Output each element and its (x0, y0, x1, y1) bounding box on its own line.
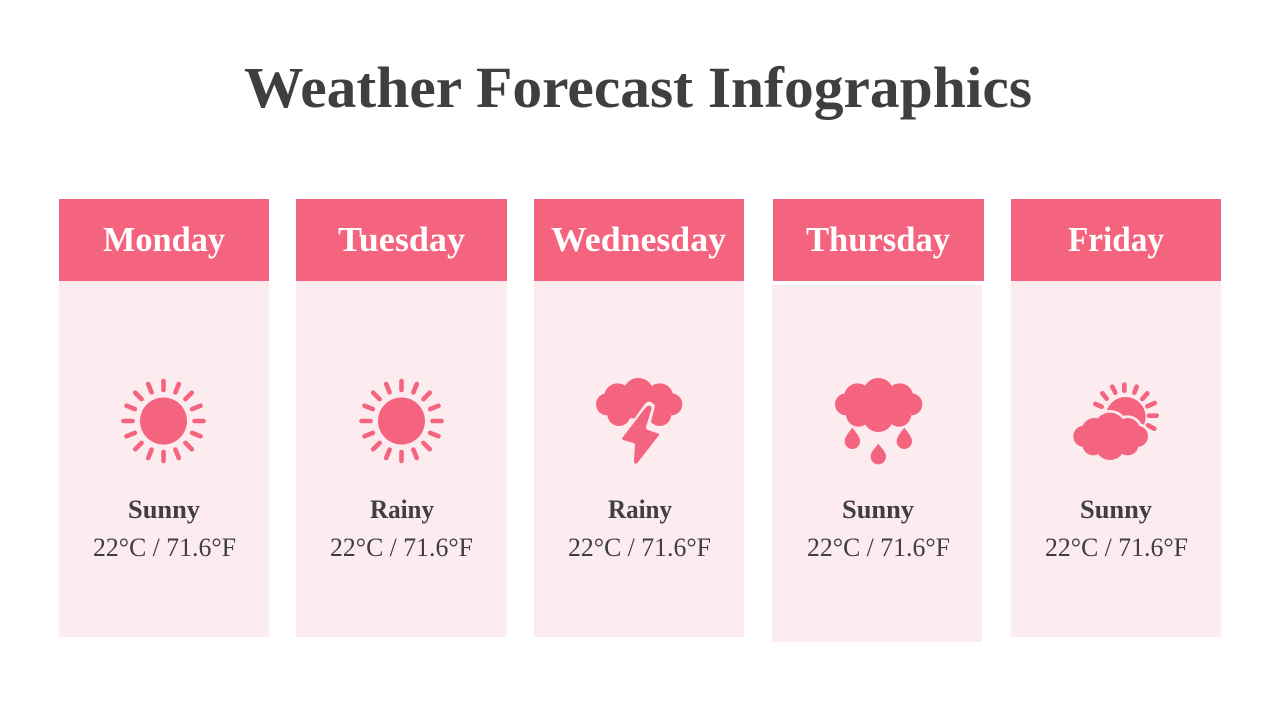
Thursday condition: Sunny (842, 495, 914, 524)
icon: rain cloud (835, 378, 922, 464)
Monday temperature: 22°C / 71.6°F (93, 533, 236, 562)
Friday body (1011, 281, 1221, 637)
Tuesday condition: Rainy (370, 495, 434, 524)
Monday label: Monday (103, 220, 225, 259)
panel: Friday (1011, 199, 1221, 637)
Monday condition: Sunny (128, 495, 200, 524)
icon: sun (362, 381, 442, 461)
Monday header (59, 199, 269, 281)
Wednesday body (534, 281, 744, 637)
Wednesday header (534, 199, 744, 281)
title: Weather Forecast Infographics (244, 55, 1032, 120)
Thursday header (773, 199, 984, 281)
Monday body (59, 281, 269, 637)
panel: Thursday (772, 199, 984, 642)
Thursday body (772, 285, 982, 642)
panel: Wednesday (534, 199, 744, 637)
Friday header (1011, 199, 1221, 281)
Wednesday label: Wednesday (551, 220, 727, 259)
Tuesday body (296, 281, 507, 637)
Friday label: Friday (1068, 220, 1164, 259)
Tuesday header (296, 199, 507, 281)
panel: Monday (59, 199, 269, 637)
Thursday temperature: 22°C / 71.6°F (807, 533, 950, 562)
Wednesday temperature: 22°C / 71.6°F (568, 533, 711, 562)
icon: thunderstorm cloud (596, 378, 682, 465)
Tuesday temperature: 22°C / 71.6°F (330, 533, 473, 562)
Tuesday label: Tuesday (338, 220, 466, 259)
Friday temperature: 22°C / 71.6°F (1045, 533, 1188, 562)
icon: sun behind cloud (1073, 385, 1157, 460)
panel: Tuesday (296, 199, 507, 637)
Wednesday condition: Rainy (608, 495, 672, 524)
Thursday label: Thursday (806, 220, 950, 259)
icon: sun (124, 381, 204, 461)
Friday condition: Sunny (1080, 495, 1152, 524)
